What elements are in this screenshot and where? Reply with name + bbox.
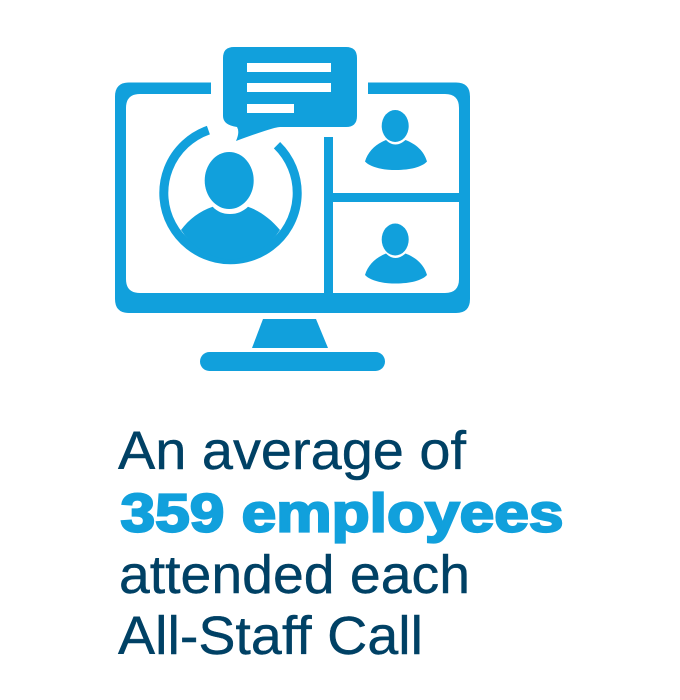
line 3: attended each: [119, 545, 470, 605]
line 2: highlighted figure: 359 employees: [120, 484, 564, 544]
icon: video call on desktop monitor: [115, 47, 470, 371]
ring: [164, 130, 297, 260]
line 4: All-Staff Call: [118, 606, 423, 666]
monitor base: [200, 352, 385, 371]
shoulders: [365, 140, 427, 170]
participant bottom right: [365, 224, 427, 284]
video panel dividers: [324, 137, 459, 293]
head: [382, 110, 409, 142]
head: [382, 224, 409, 256]
line 1: An average of: [118, 421, 467, 481]
caption: [118, 421, 564, 666]
monitor stand: [252, 319, 328, 348]
monitor frame: [115, 82, 470, 313]
participant top right: [365, 110, 427, 170]
head: [205, 152, 254, 209]
main participant: [164, 130, 297, 260]
shoulders and lower disc: [181, 207, 280, 260]
speech bubble: [223, 47, 357, 141]
shoulders: [365, 254, 427, 284]
